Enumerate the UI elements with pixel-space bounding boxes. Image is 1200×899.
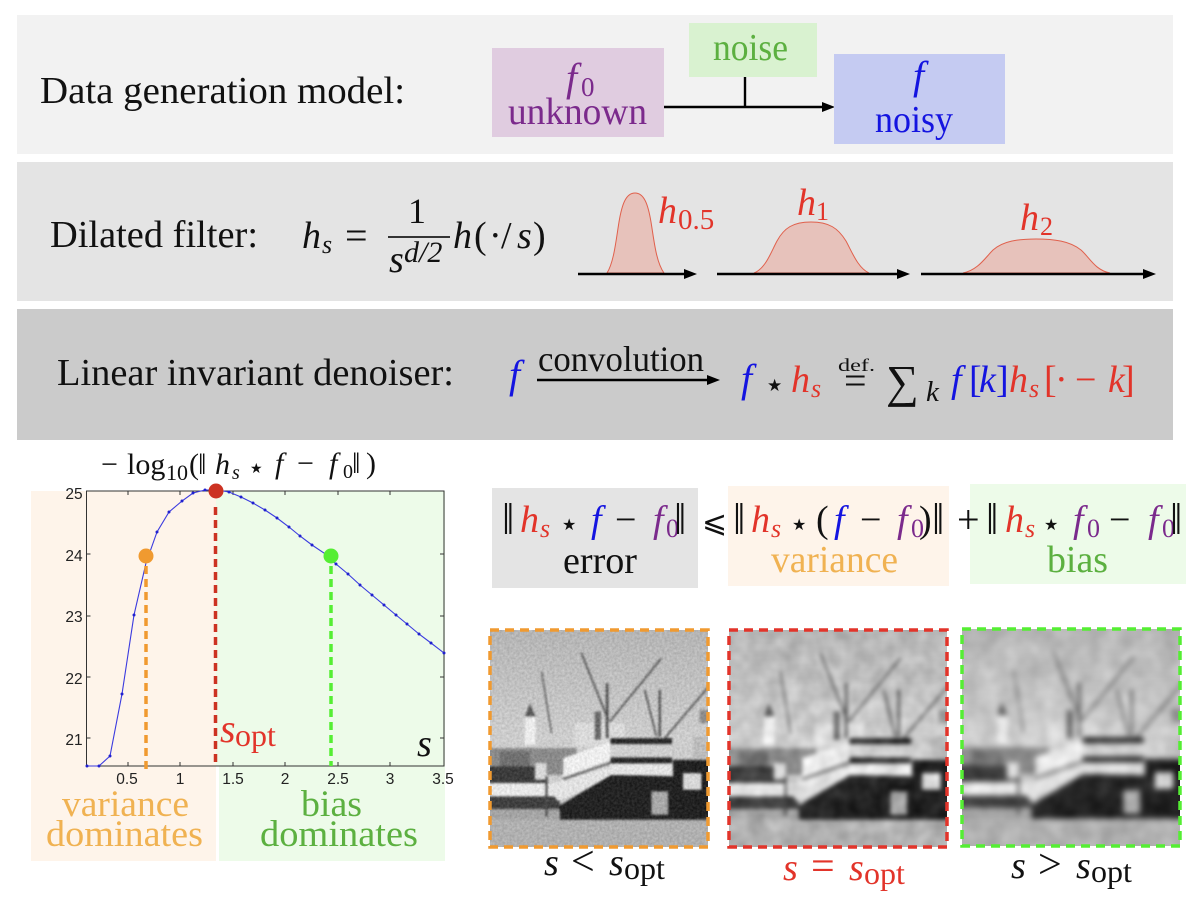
formula: dilated filter definition: h — [453, 215, 472, 257]
region: bias dominates — [216, 491, 445, 861]
term: bias: s — [1025, 514, 1035, 543]
box: f0 unknown: f — [566, 55, 582, 100]
term: bias — [970, 484, 1186, 584]
formula: dilated filter definition: ) — [533, 215, 546, 257]
formula: convolution definition: k — [926, 376, 940, 408]
term: variance: ★ — [792, 515, 806, 534]
term: bias: ‖ — [1170, 495, 1182, 544]
chart: plot frame and axes: 24 — [65, 548, 83, 565]
formula: convolution definition: ] — [1122, 359, 1135, 401]
chart: filter h1: h — [797, 182, 816, 224]
term: error: ‖ — [502, 495, 514, 544]
chart title: − — [101, 448, 118, 481]
formula: convolution definition: s — [811, 374, 821, 403]
chart: filter h2: h — [1020, 197, 1039, 239]
panel: error decomposition — [492, 484, 1186, 588]
formula: dilated filter definition: s — [517, 215, 532, 257]
term: bias: f — [1073, 499, 1088, 541]
chart: plot frame and axes: 3.5 — [432, 771, 454, 788]
label: s greater than s opt: s — [1076, 845, 1091, 887]
formula: convolution definition: k — [1108, 359, 1126, 401]
formula: dilated filter definition: · — [489, 215, 502, 257]
chart: blue curve — [86, 488, 446, 768]
formula: convolution definition — [741, 355, 1135, 408]
formula: dilated filter definition — [302, 191, 546, 281]
formula: convolution definition: ∑ — [886, 356, 919, 407]
arrow: convolution: convolution — [538, 339, 704, 379]
term: error: h — [520, 499, 539, 541]
box: noise: noise — [713, 27, 788, 69]
formula: dilated filter definition: d/2 — [404, 236, 442, 269]
formula: convolution definition: = — [844, 358, 867, 403]
box: f noisy: f — [913, 53, 929, 98]
label: s equals s opt: s — [849, 847, 864, 889]
chart title: − — [297, 447, 314, 480]
panel: data generation model — [17, 15, 1173, 154]
term: error: 0 — [666, 514, 679, 543]
chart title: ‖ — [198, 448, 206, 481]
term: bias: 0 — [1162, 514, 1175, 543]
term: error: ★ — [562, 515, 576, 534]
term: error: f — [653, 499, 668, 541]
term: bias: ★ — [1044, 515, 1058, 534]
formula: convolution definition: k — [979, 359, 997, 401]
term: variance: 0 — [911, 514, 924, 543]
region: variance dominates: dominates — [46, 814, 203, 855]
term: variance: ) — [919, 499, 932, 541]
image: optimally smoothed boat — [727, 628, 949, 849]
formula: convolution definition: def. — [838, 355, 875, 375]
box: f0 unknown — [492, 48, 664, 137]
chart: plot frame and axes: 1 — [176, 771, 184, 788]
label: s less than s opt: s — [609, 842, 624, 884]
label: s less than s opt: s — [544, 842, 559, 884]
term: bias: ‖ — [986, 495, 998, 544]
marker: variance point — [138, 548, 154, 772]
term: variance: s — [771, 514, 781, 543]
chart: plot frame and axes — [65, 486, 454, 788]
chart: filter h0.5: 0.5 — [678, 204, 714, 236]
formula: convolution definition: [ — [1044, 359, 1057, 401]
chart title: f — [329, 447, 341, 480]
label: s equals s opt: s — [783, 847, 798, 889]
chart: plot frame and axes: 2.5 — [327, 771, 349, 788]
formula: convolution definition: ] — [996, 359, 1009, 401]
marker: bias point — [324, 548, 338, 766]
chart title: 0 — [343, 461, 353, 483]
label: s greater than s opt: s — [1011, 845, 1026, 887]
formula: convolution definition: − — [1075, 359, 1096, 401]
heading: linear invariant denoiser: Linear invariant denoiser: — [57, 352, 454, 394]
term: variance: ‖ — [932, 495, 944, 544]
chart: plot frame and axes: 1.5 — [222, 771, 244, 788]
chart title: ) — [366, 447, 376, 480]
chart title: ★ — [250, 461, 263, 477]
box: f0 unknown: 0 — [581, 72, 594, 102]
term: variance: ( — [816, 499, 829, 541]
formula: convolution definition: h — [791, 359, 810, 401]
chart title: log — [127, 448, 165, 481]
term: variance — [728, 486, 949, 586]
formula: dilated filter definition: / — [501, 215, 512, 257]
term: error: − — [615, 499, 636, 541]
marker: optimal point — [208, 484, 224, 767]
label: s opt: s — [220, 706, 236, 751]
term: bias: f — [1148, 499, 1163, 541]
label: s opt: opt — [235, 717, 276, 753]
label: s axis: s — [417, 723, 432, 765]
formula: dilated filter definition: = — [345, 213, 368, 258]
formula: dilated filter definition: ( — [474, 215, 487, 257]
formula: convolution definition: ★ — [767, 376, 782, 396]
chart title: 10 — [166, 460, 188, 485]
formula: dilated filter definition: h — [302, 215, 321, 257]
term: bias: 0 — [1087, 514, 1100, 543]
chart title: h — [215, 448, 230, 481]
panel: linear invariant denoiser — [17, 309, 1173, 440]
chart: plot frame and axes: 3 — [386, 771, 394, 788]
chart title: f — [275, 447, 287, 480]
region: bias dominates: dominates — [260, 814, 418, 855]
formula: dilated filter definition: s — [322, 230, 332, 259]
chart: filter h0.5 — [578, 190, 714, 279]
region: variance dominates — [31, 491, 216, 861]
term: variance: − — [860, 499, 881, 541]
term: error: ‖ — [674, 495, 686, 544]
formula: dilated filter definition: s — [389, 239, 404, 281]
formula: convolution definition: s — [1029, 374, 1039, 403]
chart: plot frame and axes: 23 — [65, 609, 83, 626]
chart: filter h2: 2 — [1040, 212, 1053, 241]
term: variance: h — [751, 499, 770, 541]
term: bias: − — [1109, 499, 1130, 541]
chart: filter h1: 1 — [816, 197, 829, 226]
term: bias: bias — [1047, 539, 1108, 581]
term: variance: f — [897, 499, 912, 541]
label: s less than s opt: < — [571, 839, 595, 885]
formula: convolution definition: f — [951, 359, 966, 401]
chart title: ( — [189, 448, 199, 481]
formula: convolution definition: h — [1009, 359, 1028, 401]
formula: convolution definition: · — [1055, 359, 1068, 401]
term: error: s — [540, 514, 550, 543]
panel: dilated filter — [17, 162, 1173, 301]
formula: f input: f — [509, 352, 525, 397]
box: noise — [689, 23, 817, 77]
term: error: f — [591, 499, 606, 541]
plus sign: + — [957, 497, 980, 542]
box: f noisy — [834, 53, 1005, 144]
image: over-smoothed boat — [960, 627, 1182, 848]
label: s less than s opt: opt — [624, 850, 665, 886]
region: bias dominates: bias — [301, 784, 362, 825]
chart: plot frame and axes: 0.5 — [116, 771, 138, 788]
formula: convolution definition: f — [741, 356, 757, 401]
formula: dilated filter definition: 1 — [408, 191, 426, 231]
chart: filter h2 — [921, 197, 1156, 279]
panel: error curve — [31, 447, 454, 861]
image: under-smoothed boat — [488, 628, 710, 849]
formula: convolution definition: [ — [969, 359, 982, 401]
term: variance: ‖ — [733, 495, 745, 544]
term: variance: variance — [771, 539, 898, 581]
chart: filter h1 — [717, 182, 910, 279]
label: s equals s opt: = — [811, 844, 835, 890]
box: f noisy: noisy — [875, 99, 953, 141]
label: s equals s opt: opt — [864, 855, 905, 891]
term: error: error — [563, 540, 637, 582]
chart: filter h0.5: h — [658, 190, 677, 232]
term: error — [492, 488, 698, 588]
region: variance dominates: variance — [62, 784, 189, 825]
arrow: f0 to f with noise input — [664, 77, 835, 112]
heading: dilated filter: Dilated filter: — [50, 214, 258, 256]
term: variance: f — [834, 499, 849, 541]
label: s greater than s opt: opt — [1091, 853, 1132, 889]
heading: data generation model: Data generation model: — [40, 70, 405, 112]
term: bias: h — [1005, 499, 1024, 541]
chart title: s — [232, 462, 240, 484]
inequality sign: ⩽ — [702, 505, 727, 540]
label: s greater than s opt: > — [1038, 842, 1062, 888]
chart: plot frame and axes: 2 — [281, 771, 289, 788]
chart: plot frame and axes: 21 — [65, 732, 83, 749]
box: f0 unknown: unknown — [508, 91, 647, 133]
chart title: ‖ — [352, 447, 360, 480]
chart: plot frame and axes: 22 — [65, 671, 83, 688]
chart: plot frame and axes: 25 — [65, 486, 83, 503]
